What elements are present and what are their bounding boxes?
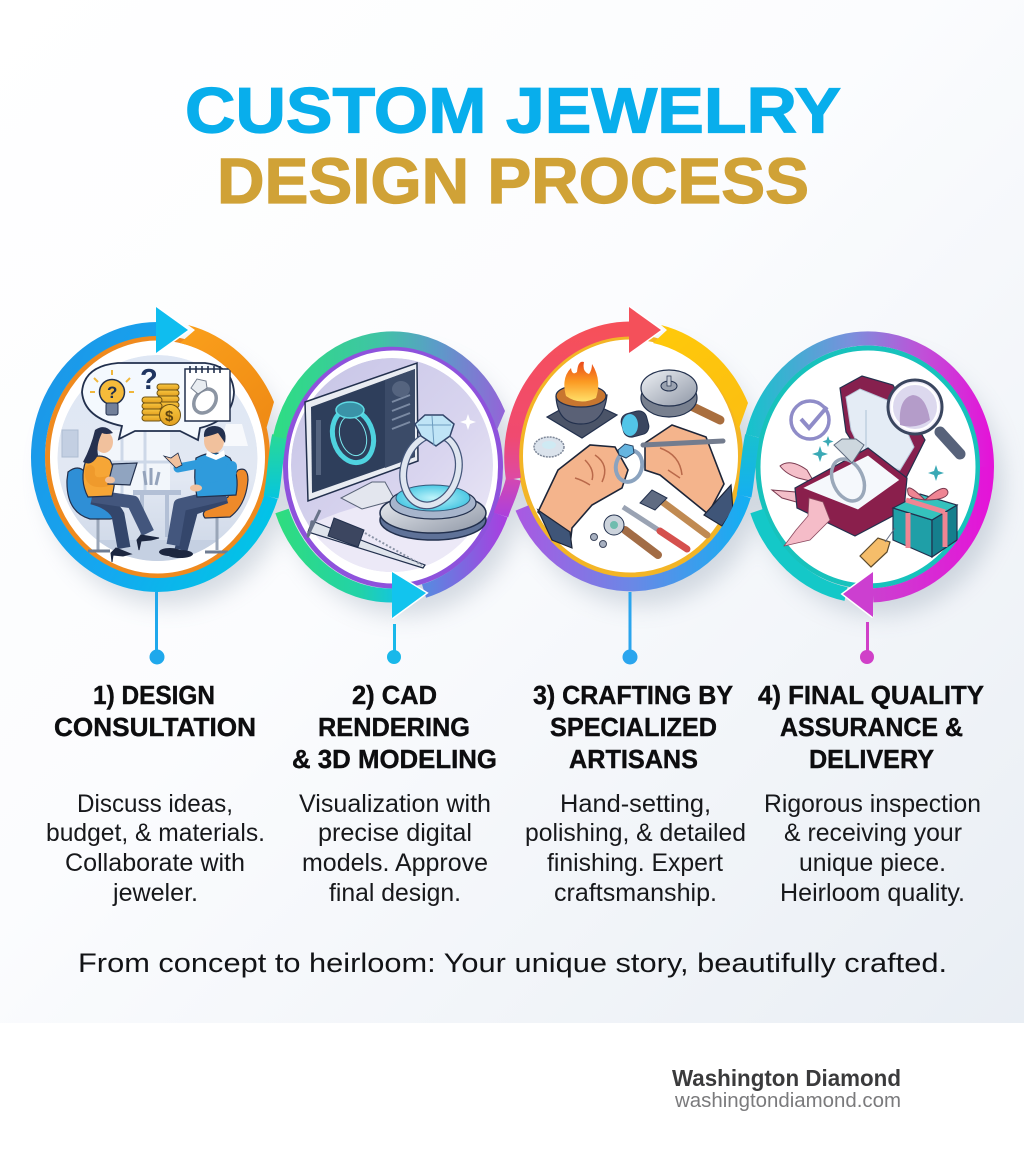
icon: right hand with setting tool [643, 425, 733, 526]
step 3 heading: 3) CRAFTING BY [533, 680, 733, 710]
icon: jeweler on chair [159, 426, 248, 558]
footer brand: Washington Diamond [672, 1065, 901, 1091]
step 3 heading [533, 680, 733, 774]
icon: gift box [893, 488, 957, 557]
connector: step 3 [622, 592, 638, 664]
step 2 description: precise digital [318, 819, 472, 847]
icon: holographic platform [380, 485, 486, 540]
title: CUSTOM JEWELRY [185, 74, 841, 146]
step 2 heading: RENDERING [318, 712, 470, 742]
title: DESIGN PROCESS [217, 145, 809, 217]
icon: speech bubble with idea, budget and ring sketch: $ [165, 408, 174, 425]
icon: hand tools [590, 490, 707, 555]
step 1 description: budget, & materials. [46, 819, 265, 847]
step 3 description: finishing. Expert [547, 849, 723, 877]
tagline: From concept to heirloom: Your unique story, beautifully crafted. [78, 948, 947, 978]
step 2 heading: 2) CAD [352, 680, 437, 710]
step 3 heading: ARTISANS [569, 744, 698, 774]
step 2 heading [292, 680, 497, 774]
step 2 description: final design. [329, 879, 461, 907]
step 1 heading: CONSULTATION [54, 712, 256, 742]
step 4 description: Heirloom quality. [780, 879, 965, 907]
icon: polishing disc [641, 370, 720, 420]
icon: diamond ring [395, 414, 476, 512]
circle drop shadows [46, 345, 1002, 615]
icon: furnace flame [547, 362, 617, 438]
footer brand [672, 1065, 901, 1112]
icon: client on chair [67, 427, 159, 562]
step 4 heading: DELIVERY [809, 744, 934, 774]
step 3 description [525, 790, 746, 907]
process ring and arrows: step 3 [501, 307, 748, 584]
process ring and arrows: step 2 [273, 331, 505, 618]
step 1 description: Collaborate with [65, 849, 245, 877]
step 4 heading: ASSURANCE & [780, 712, 963, 742]
icon: price tag [860, 528, 895, 567]
footer brand: washingtondiamond.com [674, 1090, 901, 1112]
process ring and arrows: step 1 [38, 307, 279, 585]
icon: speech bubble with idea, budget and ring sketch [82, 363, 234, 440]
icon: sparkles [812, 436, 944, 481]
step 4 description: Rigorous inspection [764, 790, 981, 818]
step 3 description: craftsmanship. [554, 879, 717, 907]
icon: magnifying glass [888, 380, 960, 454]
icon: speech bubble with idea, budget and ring sketch: ? [140, 364, 158, 396]
icon: left hand with ring [538, 444, 646, 548]
step 4 description [764, 790, 981, 907]
step 4 heading [758, 680, 984, 774]
step 4 description: & receiving your [784, 819, 962, 847]
step 3 heading: SPECIALIZED [550, 712, 717, 742]
connector: step 2 [387, 624, 401, 664]
step 3 illustration: artisans crafting [520, 337, 740, 575]
step 2 description [299, 790, 491, 907]
step 2 description: Visualization with [299, 790, 491, 818]
icon: loupe and gem ring [534, 409, 651, 457]
step 4 description: unique piece. [799, 849, 946, 877]
icon: digital caliper [307, 510, 425, 568]
icon: check mark badge [791, 401, 829, 439]
step 3 description: polishing, & detailed [525, 819, 746, 847]
step 1 heading: 1) DESIGN [93, 680, 215, 710]
step 1 description: jeweler. [112, 879, 198, 907]
connector: step 4 [860, 622, 874, 664]
step 4 heading: 4) FINAL QUALITY [758, 680, 984, 710]
icon: open ring box [772, 376, 925, 546]
step 2 description: models. Approve [302, 849, 488, 877]
step 4 illustration: quality assurance and delivery [758, 348, 978, 586]
step 1 description [46, 790, 265, 907]
process ring and arrows: step 4 [744, 338, 987, 617]
step 1 description: Discuss ideas, [77, 790, 233, 818]
connector: step 1 [150, 592, 164, 664]
step 3 description: Hand-setting, [560, 790, 711, 818]
step 1 heading [54, 680, 256, 742]
icon: monitor [305, 363, 418, 509]
step 1 illustration: design consultation [48, 338, 268, 576]
title [185, 74, 841, 217]
step 2 heading: & 3D MODELING [292, 744, 497, 774]
step 2 illustration: CAD rendering [286, 348, 500, 586]
icon: speech bubble with idea, budget and ring sketch: ? [107, 383, 117, 402]
